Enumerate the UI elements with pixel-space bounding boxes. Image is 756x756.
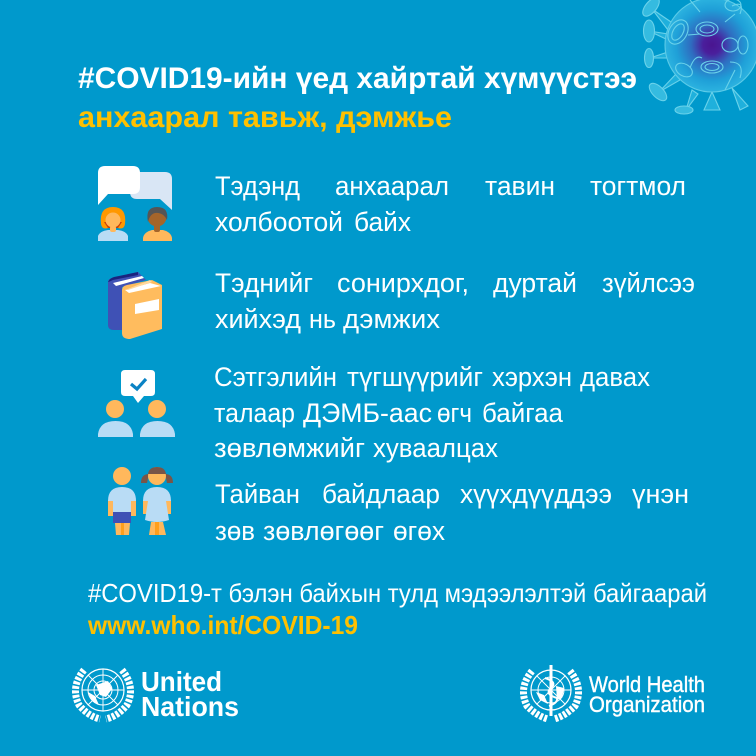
text: share WHO guidance: хуваалцах — [373, 433, 498, 463]
logo: United Nations: United — [141, 666, 222, 697]
text: share WHO guidance: байгаа — [482, 398, 564, 428]
text: stay connected — [215, 171, 686, 237]
text: stay connected: тавин — [485, 171, 555, 201]
text: support their interests: дуртай — [493, 268, 577, 298]
text: support their interests: Тэднийг — [215, 268, 313, 298]
text: share WHO guidance: давах — [580, 362, 650, 392]
logo: United Nations: Nations — [141, 691, 239, 722]
icon: books — [108, 272, 162, 339]
text: share WHO guidance: өгч — [437, 398, 472, 428]
footer message: www.who.int/COVID-19 — [87, 610, 358, 640]
text: calmly give children truthful advice: үнэн — [632, 479, 689, 509]
WHO emblem — [523, 665, 579, 719]
logo: World Health Organization — [523, 665, 705, 719]
text: calmly give children truthful advice: зөв — [215, 516, 255, 546]
footer message — [87, 578, 707, 640]
text: calmly give children truthful advice: байдлаар — [322, 479, 440, 509]
logo: World Health Organization: Organization — [589, 692, 705, 717]
text: share WHO guidance: Сэтгэлийн — [214, 362, 337, 392]
text: share WHO guidance: хэрхэн — [492, 362, 572, 392]
text: stay connected: тогтмол — [590, 171, 686, 201]
text: support their interests: зүйлсээ — [602, 268, 695, 298]
icon: boy and girl — [108, 467, 173, 535]
title: анхаарал тавьж, дэмжье — [78, 101, 452, 134]
text: share WHO guidance: зөвлөмжийг — [214, 433, 365, 463]
text: support their interests: нь — [309, 304, 336, 334]
text: calmly give children truthful advice — [215, 479, 689, 546]
text: stay connected: холбоотой — [215, 207, 343, 237]
text: calmly give children truthful advice: зөвлөгөөг — [263, 516, 384, 546]
logo: United Nations — [75, 666, 239, 722]
text: stay connected: байх — [354, 207, 411, 237]
logo: World Health Organization: World Health — [589, 672, 705, 697]
text: support their interests: дэмжих — [343, 304, 441, 334]
text: calmly give children truthful advice: Тайван — [215, 479, 300, 509]
text: share WHO guidance: талаар — [214, 398, 295, 428]
footer message: #COVID19-т бэлэн байхын тулд мэдээлэлтэй байгаарай — [88, 578, 707, 608]
text: stay connected: анхаарал — [335, 171, 449, 201]
icon: coronavirus illustration — [640, 0, 756, 114]
icon: people talking with speech bubbles — [98, 166, 172, 241]
title — [78, 62, 637, 134]
text: calmly give children truthful advice: өгөх — [393, 516, 445, 546]
text: share WHO guidance — [214, 362, 650, 463]
title: #COVID19-ийн үед хайртай хүмүүстээ — [78, 62, 637, 95]
text: support their interests: сонирхдог, — [337, 268, 469, 298]
text: support their interests — [215, 268, 695, 334]
UN emblem — [75, 669, 131, 719]
text: support their interests: хийхэд — [215, 304, 301, 334]
text: share WHO guidance: түгшүүрийг — [347, 362, 483, 392]
text: calmly give children truthful advice: хүүхдүүддээ — [460, 479, 612, 509]
icon: two people with checkmark bubble — [98, 370, 175, 437]
text: stay connected: Тэдэнд — [215, 171, 300, 201]
text: share WHO guidance: ДЭМБ-аас — [303, 398, 432, 428]
